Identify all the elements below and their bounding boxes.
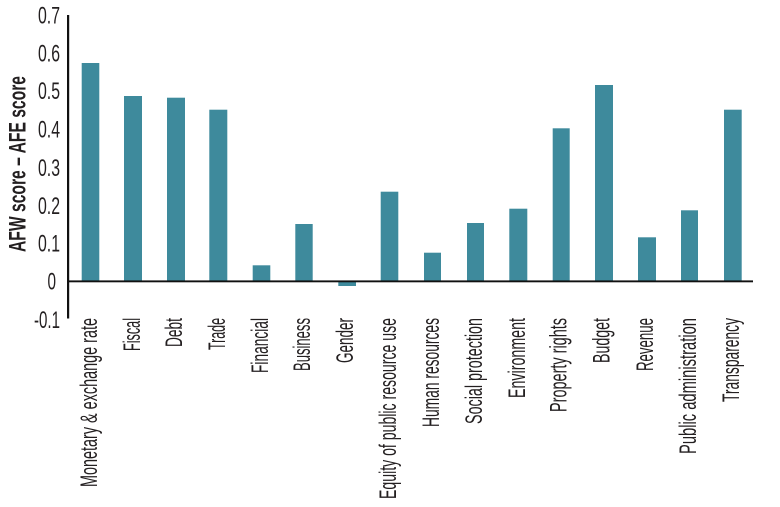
x axis category labels: Property rights <box>546 318 573 412</box>
x axis category labels: Trade <box>204 318 231 350</box>
x axis category labels: Human resources <box>418 318 445 427</box>
x axis category labels: Debt <box>161 318 188 347</box>
y axis tick labels: 0.4 <box>38 117 60 144</box>
x axis category labels: Social protection <box>461 318 488 424</box>
x axis category labels: Environment <box>504 318 531 398</box>
bars <box>82 63 742 286</box>
axes <box>67 15 753 318</box>
x axis category labels: Monetary & exchange rate <box>76 318 103 487</box>
y axis tick labels: 0.7 <box>38 2 60 29</box>
x axis category labels: Transparency <box>718 318 745 402</box>
x axis category labels: Fiscal <box>119 318 146 351</box>
x axis category labels: Business <box>289 318 316 371</box>
x axis category labels: Budget <box>588 318 616 363</box>
x axis category labels: Gender <box>332 318 359 363</box>
x axis category labels: Financial <box>247 318 274 373</box>
y axis tick labels: 0.1 <box>38 231 60 258</box>
y axis tick labels: -0.1 <box>34 307 60 334</box>
y axis tick labels: 0.2 <box>38 193 60 220</box>
x axis category labels: Public administration <box>675 318 702 454</box>
x axis category labels: Revenue <box>632 318 659 371</box>
y axis tick labels: 0.5 <box>38 78 60 105</box>
y axis tick labels: 0.3 <box>38 155 60 182</box>
y axis tick labels <box>34 2 60 334</box>
y axis tick labels: 0 <box>48 268 56 296</box>
x axis category labels: Equity of public resource use <box>375 318 402 499</box>
y axis tick labels: 0.6 <box>38 41 60 68</box>
x axis category labels <box>76 318 745 499</box>
